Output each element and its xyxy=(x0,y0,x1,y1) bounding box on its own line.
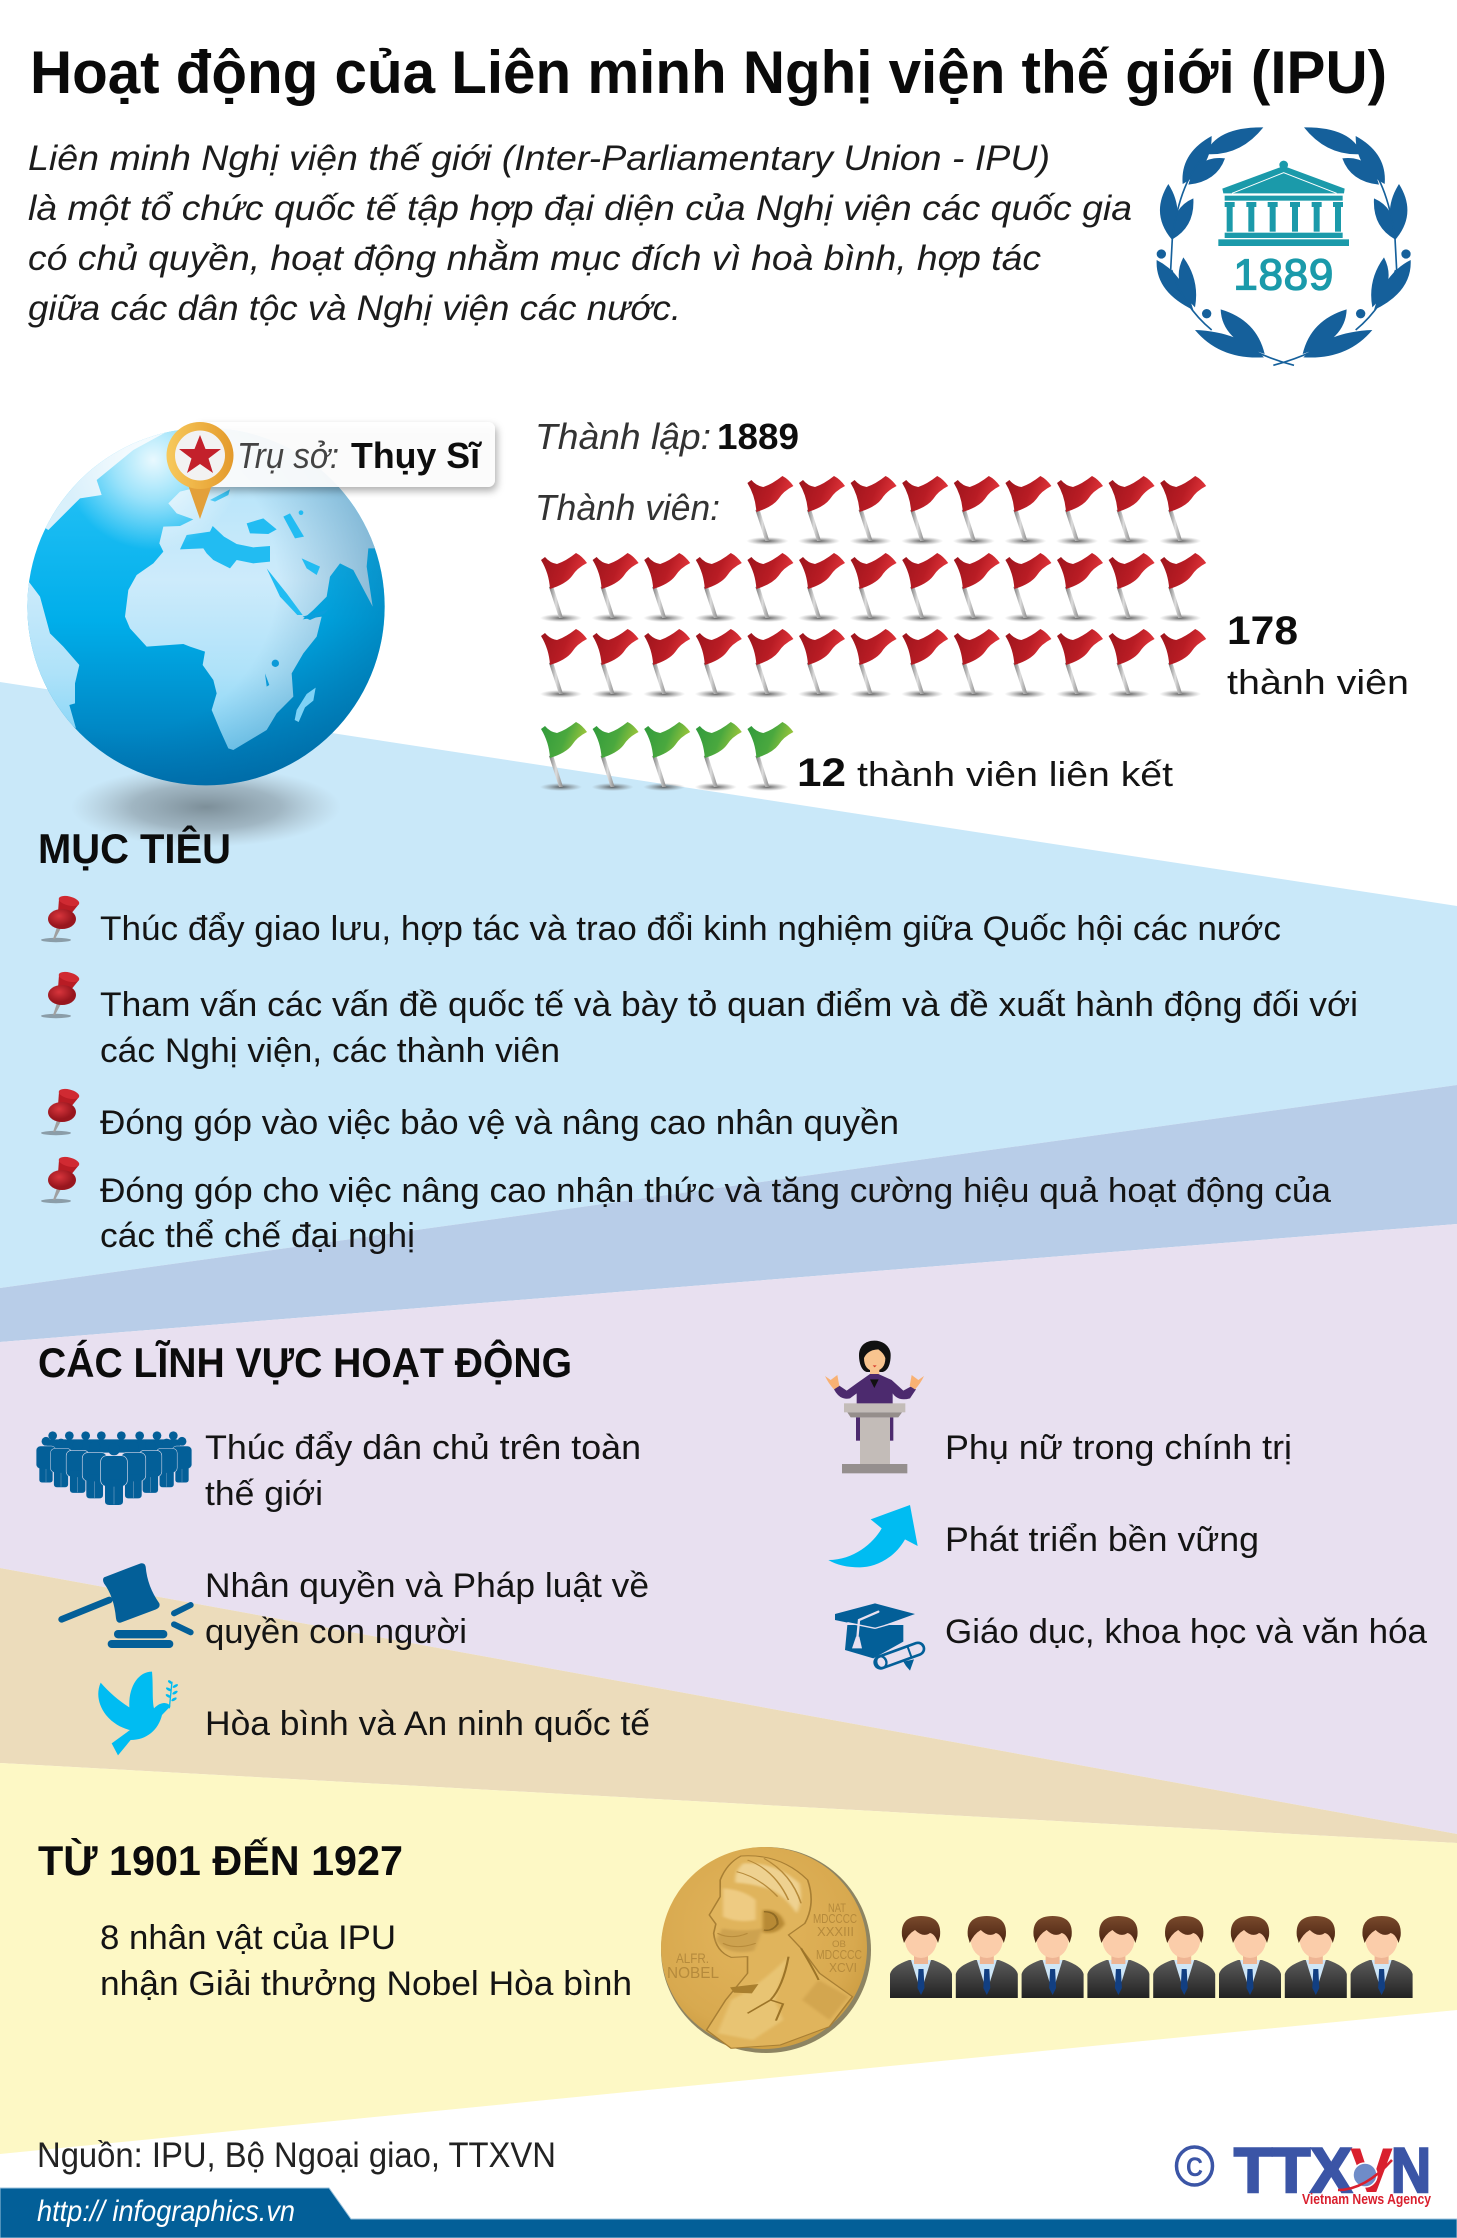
text: Nobel laureates: 8 nhân vật của IPU xyxy=(100,1919,396,1957)
icon: pushpin 2 xyxy=(41,970,80,1018)
objective 3: Đóng góp vào việc bảo vệ và nâng cao nhân quyền xyxy=(100,1104,899,1142)
background band: lavender xyxy=(0,1224,1457,1834)
background band: light blue xyxy=(0,682,1457,1288)
background band: tan xyxy=(0,1568,1457,1843)
icon: woman at lectern xyxy=(825,1341,924,1473)
objective 2 xyxy=(100,986,1358,1070)
text: Nobel laureates xyxy=(100,1919,632,2003)
logo: TTXVN xyxy=(1234,2136,1432,2208)
title: Hoạt động của Liên minh Nghị viện thế giới (IPU) xyxy=(30,39,1387,106)
callout: headquarters label xyxy=(195,422,495,487)
icon: pushpin 3 xyxy=(41,1087,80,1135)
icon: crowd of people xyxy=(36,1431,192,1505)
icon: Nobel medal: MDCCCC xyxy=(813,1911,857,1926)
founding year xyxy=(535,416,799,457)
icon: Nobel medal: XXXIII xyxy=(817,1924,854,1939)
background band: pale yellow xyxy=(0,1763,1457,2154)
icon: copyright symbol: C xyxy=(1186,2152,1203,2182)
icon: growth arrow xyxy=(828,1505,918,1567)
field: human rights: Nhân quyền và Pháp luật về xyxy=(205,1567,649,1605)
icons: eight laureates xyxy=(890,1916,1413,1998)
stat: 12 associate members: 12 xyxy=(797,751,846,795)
icon: peace dove xyxy=(98,1672,179,1755)
objective 1: Thúc đẩy giao lưu, hợp tác và trao đổi kinh nghiệm giữa Quốc hội các nước xyxy=(100,910,1281,948)
footer banner xyxy=(0,2188,1457,2238)
icon: gavel xyxy=(62,1563,191,1648)
icon: IPU logo with laurel wreath and building: 1889 xyxy=(1233,250,1333,299)
stat: 178 members: thành viên xyxy=(1227,664,1409,702)
intro paragraph: có chủ quyền, hoạt động nhằm mục đích vì hoà bình, hợp tác xyxy=(28,239,1042,278)
intro paragraph: giữa các dân tộc và Nghị viện các nước. xyxy=(28,289,681,328)
objective 4: Đóng góp cho việc nâng cao nhận thức và tăng cường hiệu quả hoạt động của xyxy=(100,1172,1331,1210)
stat: 178 members xyxy=(1227,609,1409,702)
icon: Nobel medal: MDCCCC xyxy=(816,1947,862,1962)
icon: Nobel medal: ALFR. xyxy=(676,1950,709,1966)
icon: Nobel medal: OB xyxy=(832,1939,846,1949)
icon: IPU logo with laurel wreath and building xyxy=(1157,127,1411,365)
logo: TTXVN: Vietnam News Agency xyxy=(1302,2191,1432,2208)
field: human rights xyxy=(205,1567,649,1651)
heading: objectives: MỤC TIÊU xyxy=(38,824,231,872)
source line: Nguồn: IPU, Bộ Ngoại giao, TTXVN xyxy=(37,2136,556,2175)
icon: Nobel medal: XCVI xyxy=(829,1960,857,1975)
icon: pushpin 1 xyxy=(41,894,80,942)
founding year: Thành lập: xyxy=(535,416,711,457)
icon: map pin with star xyxy=(166,422,234,519)
field: democracy: thế giới xyxy=(205,1475,323,1513)
heading: fields of activity: CÁC LĨNH VỰC HOẠT ĐỘNG xyxy=(38,1338,572,1386)
members label: Thành viên: xyxy=(535,487,720,528)
heading: 1901 to 1927: TỪ 1901 ĐẾN 1927 xyxy=(38,1836,403,1884)
icon: Nobel medal: NAT xyxy=(828,1901,847,1915)
footer url: http:// infographics.vn xyxy=(37,2195,295,2228)
objective 4 xyxy=(100,1172,1331,1255)
objectives list xyxy=(41,894,1358,1255)
logo: TTXVN: N xyxy=(1391,2136,1431,2206)
background band: steel blue overlap xyxy=(0,1085,1457,1342)
icon: Nobel medal: NOBEL xyxy=(667,1965,719,1982)
founding year: 1889 xyxy=(717,416,799,457)
field: human rights: quyền con người xyxy=(205,1613,467,1651)
flags row 1 xyxy=(746,476,1206,545)
objective 4: các thể chế đại nghị xyxy=(100,1217,415,1255)
icon: Nobel medal xyxy=(661,1847,871,2053)
logo: TTXVN: V xyxy=(1350,2136,1393,2206)
intro paragraph xyxy=(28,139,1132,328)
globe shadow xyxy=(71,767,341,847)
stat: 178 members: 178 xyxy=(1227,609,1298,653)
flags: green associate members xyxy=(540,722,793,791)
field: sustainable development: Phát triển bền vững xyxy=(945,1521,1259,1559)
intro paragraph: là một tổ chức quốc tế tập hợp đại diện của Nghị viện các quốc gia xyxy=(28,189,1132,228)
field: democracy xyxy=(205,1429,641,1513)
stat: 12 associate members: thành viên liên kết xyxy=(857,756,1174,794)
callout: headquarters label: Trụ sở: xyxy=(237,435,339,476)
flags row 3 xyxy=(540,629,1206,698)
objective 2: các Nghị viện, các thành viên xyxy=(100,1032,560,1070)
field: democracy: Thúc đẩy dân chủ trên toàn xyxy=(205,1429,641,1467)
field: peace and security: Hòa bình và An ninh quốc tế xyxy=(205,1705,650,1743)
flags row 2 xyxy=(540,553,1206,622)
objective 2: Tham vấn các vấn đề quốc tế và bày tỏ quan điểm và đề xuất hành động đối với xyxy=(100,986,1358,1024)
icon: copyright symbol xyxy=(1176,2147,1212,2185)
text: Nobel laureates: nhận Giải thưởng Nobel Hòa bình xyxy=(100,1965,632,2003)
icon: globe xyxy=(27,430,385,786)
icon: graduation cap and diploma xyxy=(835,1603,926,1671)
icon: pushpin 4 xyxy=(41,1155,80,1203)
stat: 12 associate members xyxy=(797,751,1174,795)
field: women in politics: Phụ nữ trong chính trị xyxy=(945,1429,1292,1467)
logo: TTXVN: TTX xyxy=(1234,2136,1352,2206)
callout: headquarters label: Thụy Sĩ xyxy=(351,435,482,476)
intro paragraph: Liên minh Nghị viện thế giới (Inter-Parliamentary Union - IPU) xyxy=(28,139,1050,178)
field: education, science and culture: Giáo dục, khoa học và văn hóa xyxy=(945,1613,1427,1651)
